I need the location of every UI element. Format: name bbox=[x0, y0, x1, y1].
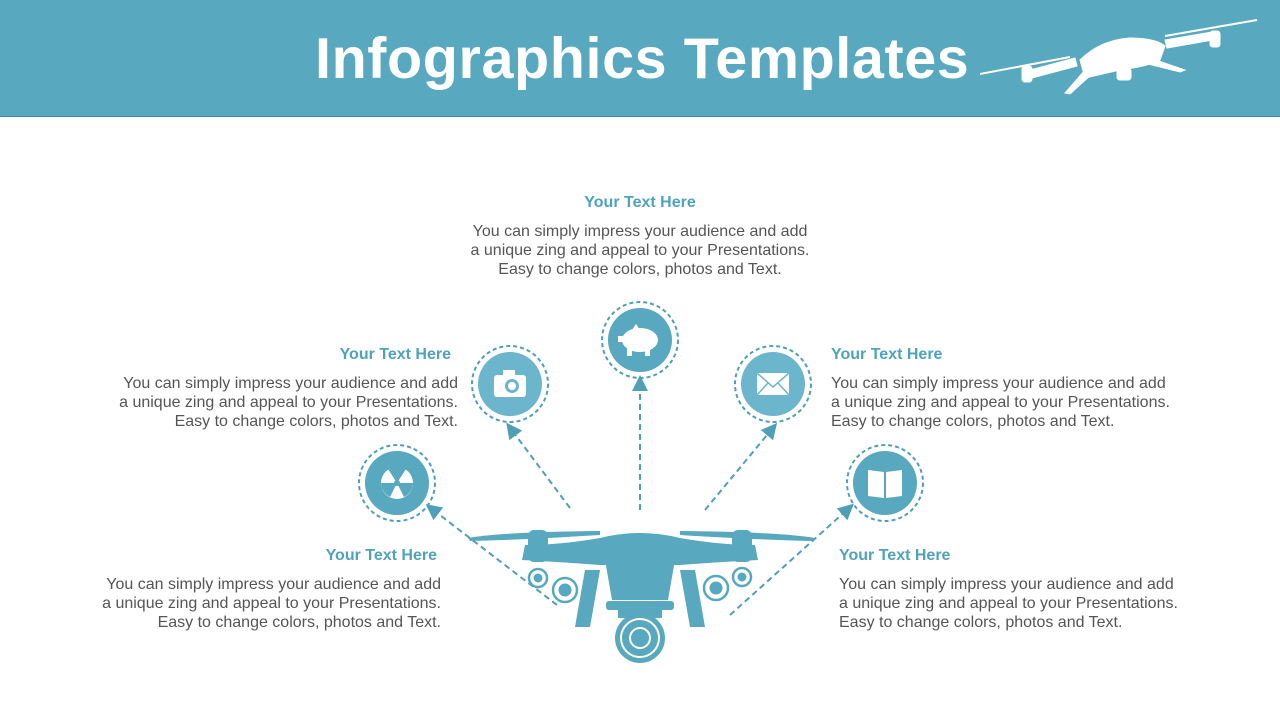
text block: upper right bbox=[831, 346, 1170, 430]
text block: lower right bbox=[839, 547, 1178, 631]
title: Infographics Templates bbox=[315, 27, 969, 91]
text block: lower left: a unique zing and appeal to your Presentations. bbox=[102, 595, 441, 612]
text block: lower left: Your Text Here bbox=[326, 547, 437, 564]
text block: upper left: You can simply impress your audience and add bbox=[123, 375, 458, 392]
drone bbox=[468, 530, 815, 663]
icon: radiation bbox=[359, 445, 435, 521]
text block: lower right: a unique zing and appeal to your Presentations. bbox=[839, 595, 1178, 612]
text block: top: a unique zing and appeal to your Presentations. bbox=[471, 242, 809, 259]
text block: upper right: Easy to change colors, photos and Text. bbox=[831, 413, 1114, 430]
icon: piggy bank bbox=[602, 302, 678, 378]
icon: camera bbox=[472, 346, 548, 422]
text block: upper right: Your Text Here bbox=[831, 346, 942, 363]
text block: upper left: Your Text Here bbox=[340, 346, 451, 363]
text block: lower right: Your Text Here bbox=[839, 547, 950, 564]
text block: lower right: Easy to change colors, photos and Text. bbox=[839, 614, 1122, 631]
text block: top: Easy to change colors, photos and Text. bbox=[498, 261, 782, 278]
header bar bbox=[0, 0, 1280, 117]
icon circles bbox=[359, 302, 923, 521]
text block: top: You can simply impress your audience and add bbox=[473, 223, 807, 240]
text block: lower left: Easy to change colors, photos and Text. bbox=[158, 614, 441, 631]
text block: lower left: You can simply impress your audience and add bbox=[106, 576, 441, 593]
icon: header drone bbox=[980, 19, 1258, 94]
text block: lower left bbox=[102, 547, 441, 631]
text block: upper left: a unique zing and appeal to your Presentations. bbox=[119, 394, 458, 411]
text block: upper right: You can simply impress your audience and add bbox=[831, 375, 1166, 392]
text block: top bbox=[471, 194, 809, 278]
text block: top: Your Text Here bbox=[584, 194, 696, 211]
arrows bbox=[432, 383, 848, 615]
icon: envelope bbox=[735, 346, 811, 422]
text block: upper left bbox=[119, 346, 458, 430]
text block: lower right: You can simply impress your audience and add bbox=[839, 576, 1174, 593]
text block: upper left: Easy to change colors, photos and Text. bbox=[175, 413, 458, 430]
icon: book bbox=[847, 445, 923, 521]
text block: upper right: a unique zing and appeal to your Presentations. bbox=[831, 394, 1170, 411]
